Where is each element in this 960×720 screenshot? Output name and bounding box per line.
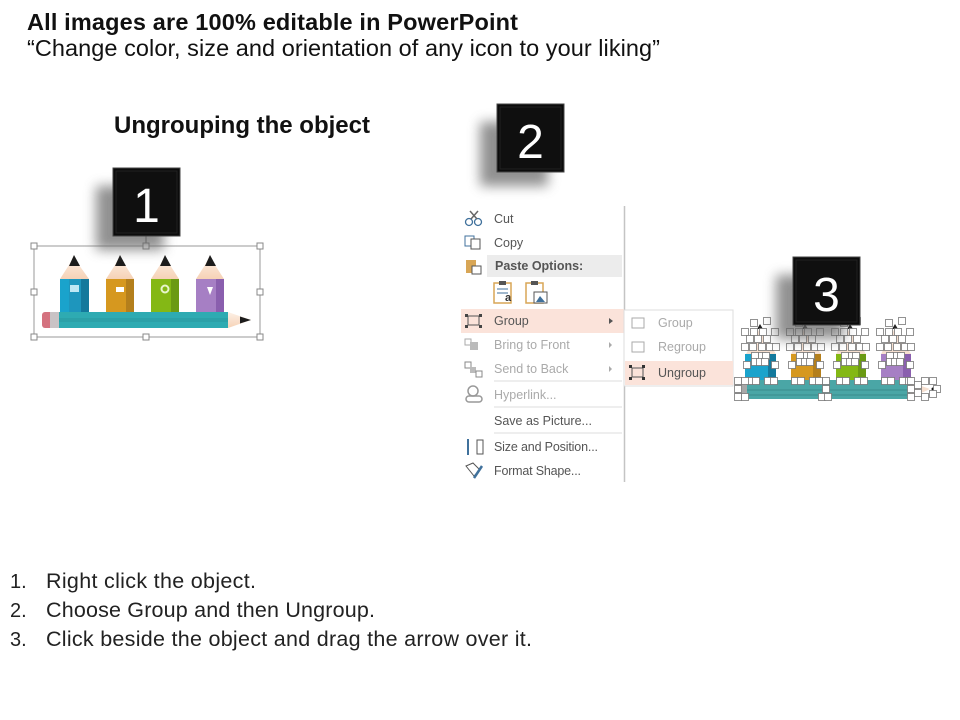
submenu item: regroup: Regroup bbox=[658, 340, 706, 354]
paste option icons: a bbox=[505, 292, 512, 304]
ungrouped pencil: green bbox=[836, 324, 866, 380]
pencil: orange bbox=[106, 255, 134, 312]
step 3 badge: 3 bbox=[813, 269, 840, 322]
pencil: purple bbox=[196, 255, 224, 312]
menu item: copy bbox=[465, 236, 524, 250]
menu item: bring to front: Bring to Front bbox=[494, 338, 570, 352]
selection frame bbox=[34, 236, 260, 337]
paste option icons bbox=[494, 281, 547, 304]
menu divider bbox=[624, 206, 626, 482]
step 3 object: ungrouped pencils bbox=[734, 318, 940, 400]
heading: editable in PowerPoint: All images are 100% editable in PowerPoint bbox=[27, 9, 518, 35]
instructions list bbox=[10, 569, 532, 651]
menu item: paste options bbox=[466, 255, 622, 277]
subheading: change color note: “Change color, size and orientation of any icon to your liking” bbox=[27, 35, 660, 61]
menu item: format shape: Format Shape... bbox=[494, 464, 581, 478]
menu item: save as picture: Save as Picture... bbox=[494, 414, 592, 428]
ungrouped pencil: blue bbox=[745, 324, 776, 380]
instruction 3: Click beside the object and drag the arrow over it. bbox=[46, 627, 532, 651]
step 3 badge bbox=[776, 257, 860, 339]
menu item: group highlighted bbox=[461, 309, 624, 333]
menu item: hyperlink: Hyperlink... bbox=[494, 388, 557, 402]
menu item: group highlighted: Group bbox=[494, 314, 529, 328]
menu item: send to back bbox=[465, 362, 612, 377]
menu item: cut bbox=[466, 211, 514, 226]
submenu item: group: Group bbox=[658, 316, 693, 330]
step 2 badge: 2 bbox=[517, 116, 544, 169]
context menu bbox=[461, 206, 733, 482]
selection handles bbox=[31, 243, 263, 340]
step 1 object: pencils with selection box bbox=[31, 236, 263, 340]
pencil: blue bbox=[60, 255, 89, 312]
step 2 badge bbox=[480, 104, 564, 186]
ungrouped pencil: horizontal teal bbox=[735, 380, 934, 400]
menu item: size and position: Size and Position... bbox=[494, 440, 598, 454]
instruction 2: Choose Group and then Ungroup. bbox=[46, 598, 375, 622]
menu item: paste options: Paste Options: bbox=[495, 259, 583, 273]
menu item: hyperlink bbox=[466, 381, 622, 402]
menu item: cut: Cut bbox=[494, 212, 514, 226]
heading: ungrouping the object: Ungrouping the object bbox=[114, 112, 370, 139]
instruction 1: Right click the object. bbox=[46, 569, 256, 593]
submenu item: ungroup highlighted: Ungroup bbox=[658, 366, 706, 380]
step 1 badge bbox=[96, 168, 180, 250]
edit point handles bbox=[734, 318, 940, 400]
submenu bbox=[624, 310, 733, 386]
pencil: horizontal teal bbox=[42, 312, 251, 328]
menu item: bring to front bbox=[465, 338, 612, 352]
instruction 2: 2. bbox=[10, 600, 27, 622]
menu item: save as picture bbox=[494, 407, 622, 433]
menu item: copy: Copy bbox=[494, 236, 524, 250]
instruction 1: 1. bbox=[10, 571, 27, 593]
ungrouped pencil: purple bbox=[881, 324, 911, 380]
menu item: send to back: Send to Back bbox=[494, 362, 569, 376]
instruction 3: 3. bbox=[10, 629, 27, 651]
step 1 badge: 1 bbox=[133, 180, 160, 233]
pencil: green bbox=[151, 255, 179, 312]
ungrouped pencil: orange bbox=[791, 324, 821, 380]
